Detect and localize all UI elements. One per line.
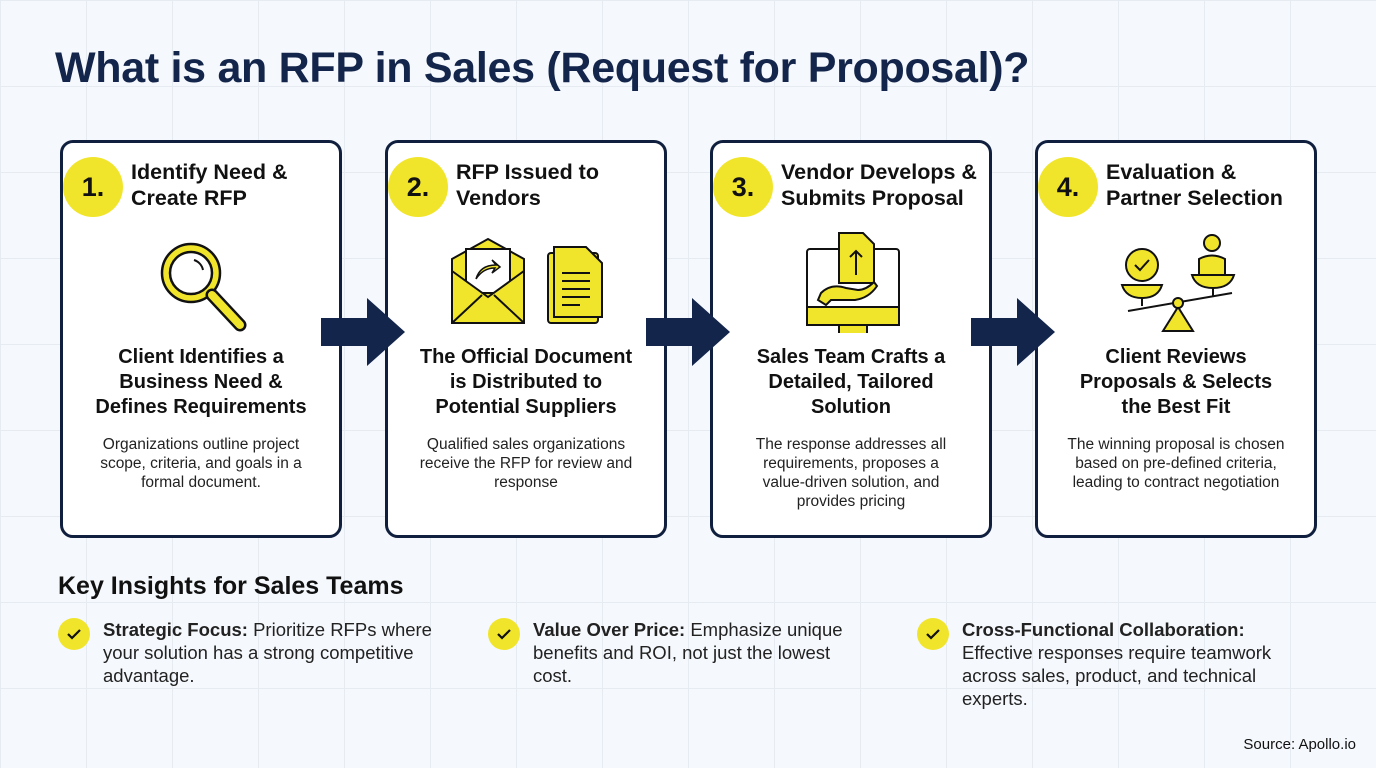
step 2 heading: RFP Issued to	[456, 160, 599, 184]
icon: magnifier	[160, 242, 246, 332]
step 2 subheading: The Official Document	[420, 346, 632, 368]
step 3 body: The response addresses all	[756, 436, 946, 453]
step 1 subheading: Business Need &	[119, 371, 283, 393]
check icon	[58, 618, 90, 650]
step number 3: 3.	[732, 172, 754, 202]
step 3 heading	[781, 160, 977, 210]
step 4 body: The winning proposal is chosen based on pre-defined criteria, leading to contract negotiation	[1067, 436, 1285, 491]
icon: monitor with hand and document	[806, 232, 900, 333]
step 1 body: Organizations outline project scope, criteria, and goals in a formal document.	[100, 436, 302, 491]
title: What is an RFP in Sales (Request for Proposal)?	[55, 44, 1029, 92]
step 3 body: value-driven solution, and	[763, 474, 939, 491]
step number 3	[713, 157, 773, 217]
step 3 body	[756, 436, 946, 510]
step 1 heading: Create RFP	[131, 186, 247, 210]
step number 4: 4.	[1057, 172, 1079, 202]
step 1 subheading: Client Identifies a	[118, 346, 284, 368]
step 3 subheading	[757, 346, 946, 418]
step 4 heading: Evaluation &	[1106, 160, 1236, 184]
step 1 subheading: Defines Requirements	[95, 396, 307, 418]
step 3 subheading: Solution	[811, 396, 891, 418]
step 1 heading: Identify Need &	[131, 160, 288, 184]
check icon	[488, 618, 520, 650]
step 3 heading: Vendor Develops &	[781, 160, 977, 184]
panel: step 4	[1035, 140, 1317, 538]
step 1 heading	[131, 160, 288, 210]
step number 1: 1.	[82, 172, 104, 202]
step number 2	[388, 157, 448, 217]
insight 3: Cross-Functional Collaboration:	[962, 619, 1245, 640]
key insights heading: Key Insights for Sales Teams	[58, 572, 404, 600]
step 4 subheading: Proposals & Selects	[1080, 371, 1272, 393]
insight 3	[917, 618, 1272, 709]
step 3 heading: Submits Proposal	[781, 186, 964, 210]
source: Source: Apollo.io	[1243, 736, 1356, 753]
check icon	[917, 618, 949, 650]
icon: envelope and document	[451, 238, 603, 324]
step 3 subheading: Sales Team Crafts a	[757, 346, 945, 368]
step 4 heading	[1106, 160, 1283, 210]
step 2 heading	[456, 160, 599, 210]
arrow 3	[971, 298, 1055, 366]
step 4 subheading	[1080, 346, 1272, 418]
insight 3: Effective responses require teamwork across sales, product, and technical experts.	[962, 642, 1271, 709]
step 3 body: provides pricing	[797, 493, 905, 510]
panel: step 2	[385, 140, 667, 538]
step 2 body: Qualified sales organizations receive the RFP for review and response	[420, 436, 632, 491]
step number 2: 2.	[407, 172, 429, 202]
step 4 subheading: the Best Fit	[1122, 396, 1230, 418]
panel: step 3	[710, 140, 992, 538]
step 1 subheading	[95, 346, 307, 418]
step 2 subheading	[420, 346, 632, 418]
panel: step 1	[60, 140, 342, 538]
insight 1: Strategic Focus: Prioritize RFPs where your solution has a strong competitive advantage.	[103, 619, 432, 686]
arrow 2	[646, 298, 730, 366]
arrow 1	[321, 298, 405, 366]
icon: balance scale	[1120, 234, 1236, 332]
step 4 heading: Partner Selection	[1106, 186, 1283, 210]
step 3 body: requirements, proposes a	[763, 455, 939, 472]
step 3 subheading: Detailed, Tailored	[768, 371, 934, 393]
insight 2: Value Over Price: Emphasize unique benefits and ROI, not just the lowest cost.	[533, 619, 843, 686]
step 2 subheading: is Distributed to	[450, 371, 602, 393]
step 2 heading: Vendors	[456, 186, 541, 210]
step number 4	[1038, 157, 1098, 217]
step 4 subheading: Client Reviews	[1105, 346, 1247, 368]
step number 1	[63, 157, 123, 217]
step 2 subheading: Potential Suppliers	[435, 396, 617, 418]
